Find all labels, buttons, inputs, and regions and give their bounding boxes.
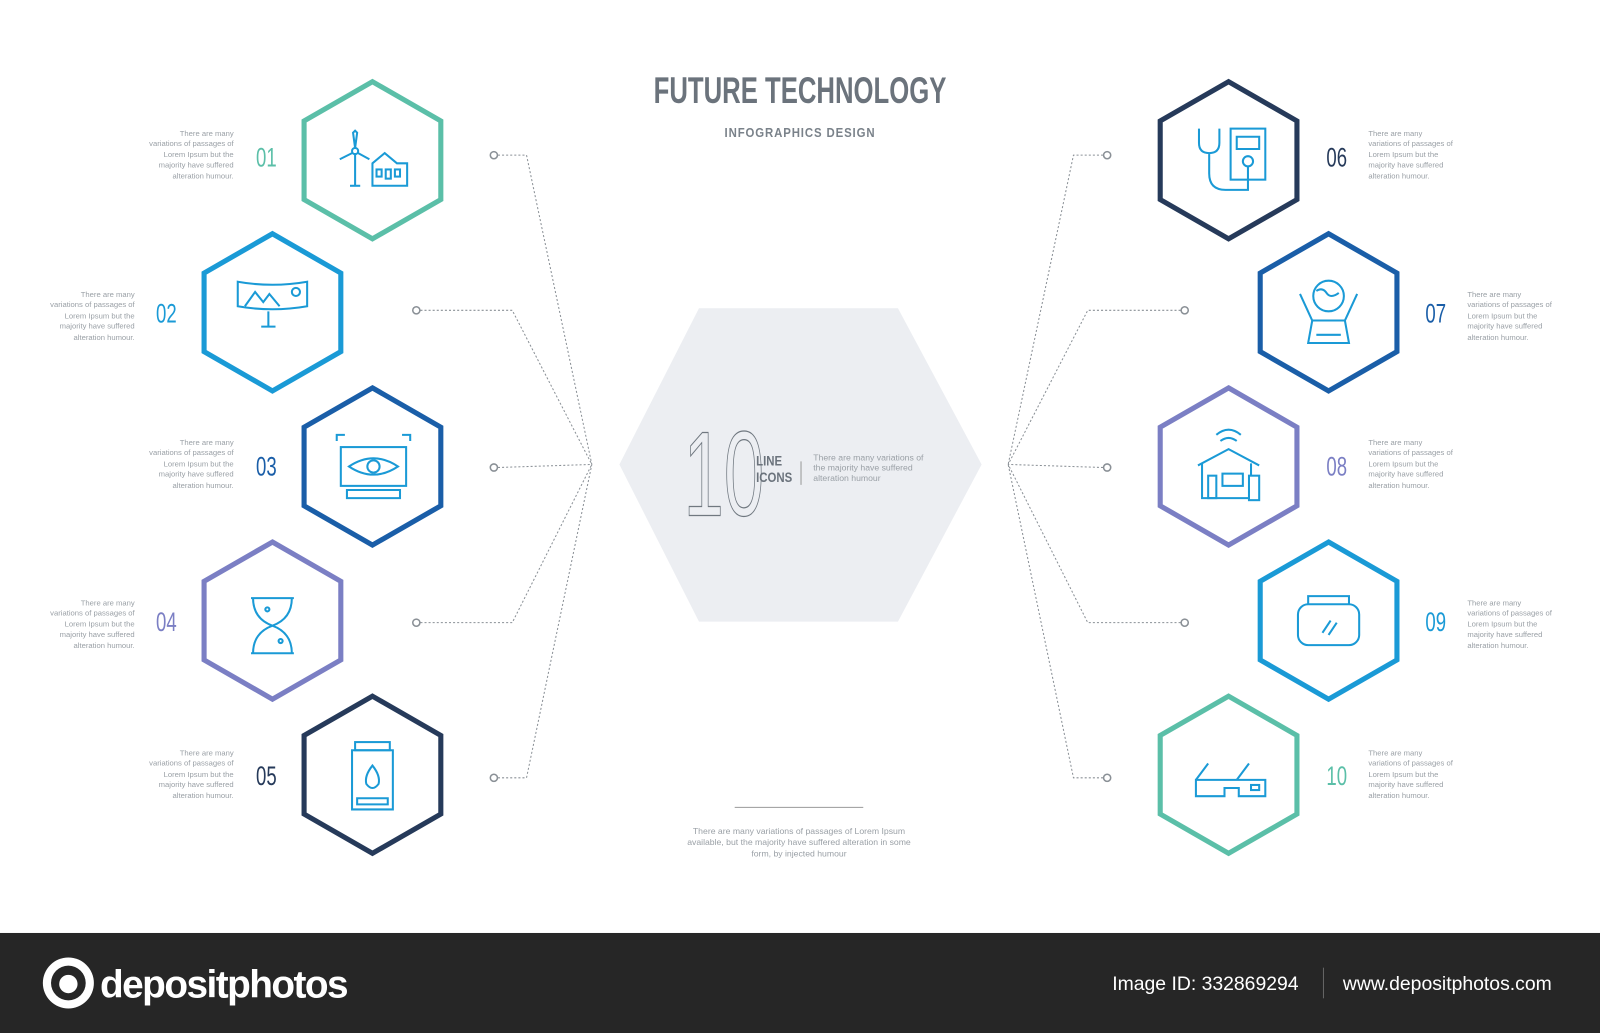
item 03: variations of passages of (149, 448, 235, 457)
item 03: There are many (180, 438, 234, 447)
item 04: majority have suffered (60, 630, 135, 639)
item 02: There are many (81, 290, 135, 299)
item 05: 05 (256, 761, 277, 791)
item 09: majority have suffered (1467, 630, 1542, 639)
item 06 (1160, 82, 1454, 239)
item 09: variations of passages of (1467, 609, 1553, 618)
item 05: Lorem Ipsum but the (164, 770, 234, 779)
item 08: alteration humour. (1368, 481, 1430, 490)
item 03: majority have suffered (159, 470, 234, 479)
footer bar: Image ID: 332869294 (1112, 973, 1299, 995)
title: FUTURE TECHNOLOGY (654, 69, 946, 111)
title (654, 69, 946, 140)
item 01: Lorem Ipsum but the (164, 150, 234, 159)
item 01 (149, 82, 441, 239)
item 08: majority have suffered (1368, 470, 1443, 479)
item 01: 01 (256, 142, 277, 172)
item 02: majority have suffered (60, 322, 135, 331)
central hexagon: the majority have suffered (813, 463, 913, 473)
item 03: Lorem Ipsum but the (164, 459, 234, 468)
item 06: There are many (1368, 129, 1422, 138)
central hexagon: LINE (756, 452, 782, 469)
item 01: There are many (180, 129, 234, 138)
item 01: majority have suffered (159, 160, 234, 169)
item 06: majority have suffered (1368, 160, 1443, 169)
item 07: majority have suffered (1467, 322, 1542, 331)
item 01: variations of passages of (149, 139, 235, 148)
central hexagon (619, 308, 982, 622)
item 06: variations of passages of (1368, 139, 1454, 148)
item 02: 02 (156, 298, 177, 328)
footer bar: depositphotos (100, 963, 347, 1006)
item 02 (50, 234, 341, 391)
item 07: Lorem Ipsum but the (1467, 311, 1537, 320)
central hexagon: 10 (684, 408, 764, 542)
item 08 (1160, 388, 1454, 545)
item 10: There are many (1368, 748, 1422, 757)
bottom caption: form, by injected humour (751, 848, 847, 858)
title: INFOGRAPHICS DESIGN (725, 125, 875, 140)
item 09: Lorem Ipsum but the (1467, 620, 1537, 629)
item 03: 03 (256, 451, 277, 481)
item 07: variations of passages of (1467, 300, 1553, 309)
item 09: There are many (1467, 598, 1521, 607)
item 02: Lorem Ipsum but the (65, 311, 135, 320)
item 08: Lorem Ipsum but the (1368, 459, 1438, 468)
item 02: variations of passages of (50, 300, 136, 309)
item 10: majority have suffered (1368, 780, 1443, 789)
connectors (420, 155, 1181, 778)
item 07: 07 (1425, 298, 1446, 328)
footer bar (0, 933, 1600, 1033)
item 08: variations of passages of (1368, 448, 1454, 457)
item 05: majority have suffered (159, 780, 234, 789)
item 07: There are many (1467, 290, 1521, 299)
item 10 (1160, 696, 1454, 853)
bottom caption (687, 807, 911, 858)
item 06: Lorem Ipsum but the (1368, 150, 1438, 159)
item 05: alteration humour. (173, 791, 234, 800)
central hexagon: ICONS (756, 469, 793, 485)
item 06: alteration humour. (1368, 172, 1430, 181)
item 09: alteration humour. (1467, 641, 1529, 650)
item 03 (149, 388, 441, 545)
item 08: There are many (1368, 438, 1422, 447)
item 05 (149, 696, 441, 853)
item 01: alteration humour. (173, 172, 234, 181)
bottom caption: There are many variations of passages of Lorem Ipsum (693, 826, 905, 836)
footer bar: www.depositphotos.com (1342, 973, 1552, 995)
item 10: alteration humour. (1368, 791, 1430, 800)
item 10: 10 (1326, 761, 1347, 791)
item 04: alteration humour. (74, 641, 135, 650)
central hexagon: There are many variations of (813, 452, 924, 462)
item 10: variations of passages of (1368, 759, 1454, 768)
item 04: There are many (81, 598, 135, 607)
item 04: Lorem Ipsum but the (65, 620, 135, 629)
item 04: 04 (156, 606, 177, 637)
item 03: alteration humour. (173, 481, 234, 490)
item 09: 09 (1425, 606, 1446, 637)
central hexagon: alteration humour (813, 473, 881, 483)
item 04 (50, 542, 341, 699)
item 05: There are many (180, 748, 234, 757)
item 10: Lorem Ipsum but the (1368, 770, 1438, 779)
item 04: variations of passages of (50, 609, 136, 618)
item 05: variations of passages of (149, 759, 235, 768)
item 08: 08 (1326, 451, 1347, 481)
item 07: alteration humour. (1467, 333, 1529, 342)
item 06: 06 (1326, 142, 1347, 172)
item 02: alteration humour. (74, 333, 135, 342)
bottom caption: available, but the majority have suffered alteration in some (687, 837, 911, 847)
item 09 (1260, 542, 1553, 699)
item 07 (1260, 234, 1553, 391)
